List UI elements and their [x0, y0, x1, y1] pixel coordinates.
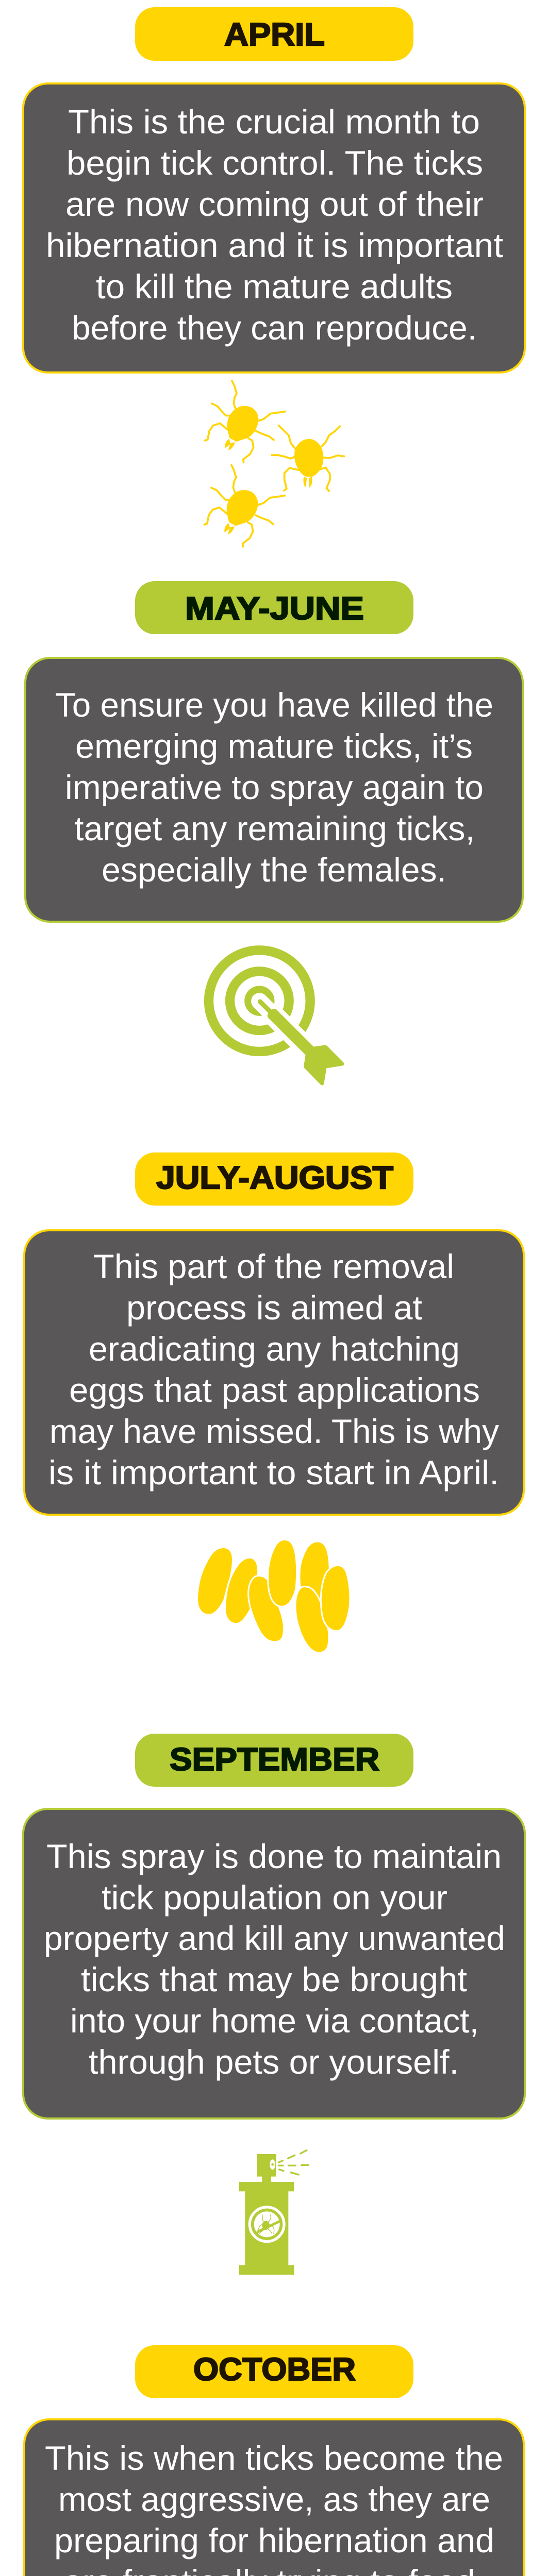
section: July-August — [24, 1153, 524, 1653]
panel: July-August text: process is aimed at — [126, 1289, 422, 1327]
icon: spray can — [239, 2150, 308, 2275]
heading: May-June — [135, 581, 413, 634]
panel: September text — [23, 1809, 525, 2119]
panel: September text: through pets or yourself. — [89, 2043, 459, 2081]
section: April — [23, 7, 525, 547]
panel: September text: into your home via contact, — [70, 2002, 479, 2040]
panel: April text: before they can reproduce. — [72, 309, 477, 347]
icon: target with arrow — [209, 950, 345, 1087]
panel: September text: This spray is done to maintain — [46, 1837, 502, 1875]
panel: October text: This is when ticks become the — [45, 2439, 503, 2477]
heading: July-August: JULY-AUGUST — [156, 1160, 393, 1196]
tick, right — [272, 426, 344, 491]
heading: April — [135, 7, 413, 61]
panel: October text: most aggressive, as they are — [58, 2480, 490, 2518]
panel: July-August text: eradicating any hatching — [89, 1330, 460, 1368]
panel: October text — [24, 2419, 524, 2576]
tick, lower left — [204, 465, 285, 547]
panel: September text: property and kill any unwanted — [44, 1919, 505, 1957]
panel: May-June text: To ensure you have killed the — [55, 686, 493, 724]
panel: July-August text — [24, 1230, 524, 1515]
panel: October text: preparing for hibernation and — [54, 2521, 494, 2560]
panel: July-August text: is it important to start in April. — [48, 1453, 499, 1492]
panel: May-June text: especially the females. — [102, 851, 446, 889]
panel: May-June text: emerging mature ticks, it’s — [75, 727, 473, 765]
panel: May-June text: target any remaining ticks, — [74, 809, 475, 848]
panel: May-June text — [25, 658, 523, 922]
section: October — [24, 2345, 524, 2576]
panel: April text: This is the crucial month to — [68, 103, 480, 141]
panel: May-June text: imperative to spray again to — [65, 768, 484, 806]
panel: April text — [23, 83, 525, 372]
icon: tick eggs — [198, 1539, 350, 1653]
panel: July-August text: eggs that past applications — [69, 1371, 480, 1409]
panel: April text: to kill the mature adults — [96, 267, 453, 306]
panel: September text: ticks that may be brought — [81, 1960, 467, 1998]
heading: September: SEPTEMBER — [170, 1742, 379, 1777]
heading: April: APRIL — [224, 17, 325, 53]
panel: July-August text: may have missed. This is why — [49, 1412, 499, 1450]
heading: October: OCTOBER — [193, 2352, 356, 2387]
panel: July-August text: This part of the removal — [93, 1247, 454, 1285]
tick, upper left — [205, 381, 285, 463]
icon: three ticks — [204, 381, 344, 547]
heading: July-August — [135, 1153, 413, 1206]
heading: May-June: MAY-JUNE — [185, 591, 364, 626]
section: May-June — [25, 581, 523, 1087]
panel: April text: hibernation and it is important — [46, 226, 503, 264]
heading: October — [135, 2345, 413, 2398]
section: September — [23, 1734, 525, 2275]
heading: September — [135, 1734, 413, 1787]
panel: April text: begin tick control. The ticks — [67, 144, 483, 182]
panel: September text: tick population on your — [102, 1878, 447, 1917]
panel: April text: are now coming out of their — [65, 185, 484, 223]
